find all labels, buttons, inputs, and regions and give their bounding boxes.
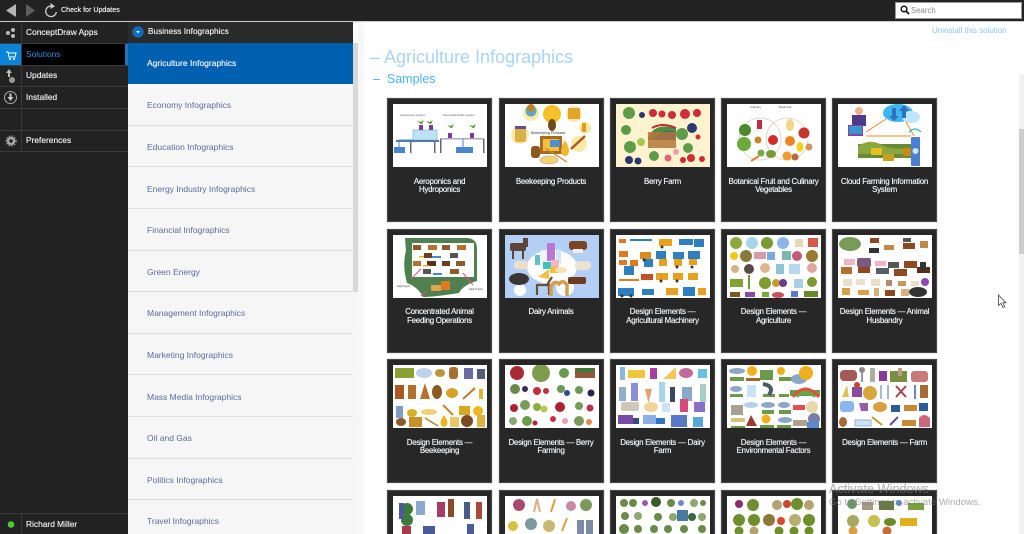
thumbnail: agriculture elements: [727, 235, 821, 298]
list item: Economy: [128, 84, 353, 126]
card title: [737, 438, 810, 455]
card title: Farm: [654, 446, 671, 455]
card title: Husbandry: [867, 316, 902, 325]
card title: Botanical Fruit and Culinary: [729, 176, 818, 186]
thumbnail: venn diagram: [727, 104, 821, 167]
card: Beekeeping Products: [498, 98, 604, 222]
card title: Beekeeping Products: [516, 176, 586, 186]
card: Design Elements Agriculture: [721, 228, 826, 352]
card: partial plants row: [610, 490, 715, 534]
card title: Design Elements —: [407, 438, 472, 446]
card title: [626, 307, 700, 325]
card: Botanical Fruit and Culinary Vegetables: [721, 98, 826, 222]
list scrollbar: [353, 43, 358, 292]
thumbnail: beekeeping: [505, 104, 599, 167]
nav: empty row: [0, 109, 128, 131]
nav: Installed: Installed: [26, 92, 57, 102]
nav: Preferences: Preferences: [26, 135, 71, 145]
nav: Installed: [0, 87, 128, 109]
nav: Solutions selected: [0, 44, 128, 66]
card title: [620, 438, 706, 455]
icon: collapse button: [132, 26, 144, 38]
card title: [407, 438, 473, 455]
check for updates label: Check for Updates: [61, 6, 120, 14]
card title: Design Elements — Animal: [840, 307, 929, 316]
list item: Education: [128, 126, 353, 167]
thumbnail: dairy elements: [616, 365, 710, 428]
card: Design Elements Beekeeping: [387, 359, 492, 483]
card title: System: [872, 185, 897, 194]
card: Aeroponics and Hydroponics: [387, 98, 492, 222]
thumbnail: animal husbandry: [838, 235, 932, 298]
list item: Mass Media: Mass Media Infographics: [147, 392, 242, 402]
thumbnail: aeroponics diagram: Aeroponics system: [400, 113, 426, 117]
card: Design Elements Dairy Farm: [610, 359, 715, 483]
list item: Energy: [128, 168, 353, 209]
page scrollbar thumb: [1019, 129, 1024, 254]
title: – Agriculture Infographics: [370, 47, 573, 67]
card title: Concentrated Animal: [405, 307, 474, 316]
card title: [841, 176, 928, 194]
category header: [128, 22, 353, 43]
card title: Design Elements — Dairy: [620, 438, 705, 446]
icon: refresh: [45, 3, 57, 18]
list item selected: Agriculture Infographics: Agriculture Infographics: [147, 58, 236, 68]
card: Concentrated Animal Feeding Operations: [387, 228, 492, 352]
nav: Updates: [0, 65, 128, 87]
list item: Green Energy: Green Energy: [147, 267, 200, 277]
list item selected: Agriculture Infographics: [128, 43, 353, 85]
category list: [128, 43, 358, 534]
card title: [414, 176, 466, 194]
thumbnail: plants: [616, 496, 710, 534]
thumbnail: cloud farming: [838, 104, 932, 167]
uninstall link: Uninstall this solution: [932, 26, 1007, 35]
thumbnail: venn diagram: Botanical: [779, 105, 792, 109]
card title: Design Elements — Berry: [508, 438, 594, 446]
thumbnail: feedlot: High Output: [469, 286, 483, 290]
nav: ConceptDraw Apps: ConceptDraw Apps: [26, 27, 98, 37]
search box: Search: [911, 6, 936, 15]
thumbnail: beekeeping elements: [393, 365, 487, 428]
card: Design Elements Farm: [832, 359, 937, 483]
card title: Feeding Operations: [407, 316, 472, 325]
nav: ConceptDraw Apps: [0, 22, 128, 44]
card: Design Elements Berry Farming: [498, 359, 604, 483]
card: Dairy Animals: [498, 228, 604, 352]
card title: Agriculture: [756, 316, 791, 325]
list item: Economy: Economy Infographics: [147, 100, 231, 110]
icon: back arrow: [6, 4, 16, 17]
nav: user status: Richard Miller: [26, 519, 77, 529]
watermark: settings note: Go to Settings to activate Windows.: [829, 497, 980, 508]
card: Berry Farm: [610, 98, 715, 222]
thumbnail: herbs: [505, 496, 599, 534]
list item: Education: Education Infographics: [147, 142, 233, 152]
thumbnail: feedlot: High Inputs: [397, 284, 411, 288]
card: partial farm elements row: [832, 490, 937, 534]
list item: Management: [128, 292, 353, 334]
card title: [728, 176, 819, 194]
list item: Oil and Gas: Oil and Gas: [147, 433, 192, 443]
icon: forward arrow: [26, 4, 35, 17]
thumbnail: aeroponics diagram: [393, 104, 487, 167]
card title: Cloud Farming Information: [841, 176, 928, 186]
card title: [405, 307, 474, 325]
samples heading: – Samples: [373, 72, 436, 86]
card: Cloud Farming Information System: [832, 98, 937, 222]
list item: Financial: Financial Infographics: [147, 225, 230, 235]
list item: Mass Media: [128, 376, 353, 417]
list item: Politics: Politics Infographics: [147, 475, 223, 485]
card title: Aeroponics and: [414, 176, 465, 186]
card title: Farming: [537, 446, 565, 455]
card title: Design Elements —: [741, 307, 806, 316]
watermark: Activate Windows: Activate Windows: [829, 482, 929, 496]
list item: Financial: [128, 209, 353, 251]
card title: Agricultural Machinery: [626, 316, 699, 325]
card title: Hydroponics: [419, 185, 460, 194]
thumbnail: berry elements: [505, 365, 599, 428]
thumbnail: fruit trees: [727, 496, 821, 534]
card title: Berry Farm: [644, 176, 681, 186]
icon: magnifier: [900, 6, 910, 15]
category header: Business Infographics: [148, 27, 229, 36]
nav: user status: [0, 513, 128, 534]
nav: Solutions selected: Solutions: [26, 49, 60, 59]
search box: [895, 2, 1022, 19]
card title: [508, 438, 594, 455]
list item: Energy: Energy Industry Infographics: [147, 184, 255, 194]
card title: Environmental Factors: [737, 446, 810, 455]
list item: Green Energy: [128, 251, 353, 292]
list item: Marketing: Marketing Infographics: [147, 350, 233, 360]
card: partial fruit trees row: [721, 490, 826, 534]
thumbnail: farm items: [838, 496, 932, 534]
card: Design Elements Animal Husbandry: [832, 228, 937, 352]
list item: Travel: Travel Infographics: [147, 516, 219, 526]
list item: Marketing: [128, 334, 353, 375]
card title: Vegetables: [755, 185, 792, 194]
thumbnail: dairy animals: [505, 235, 599, 298]
card title: Design Elements —: [630, 307, 695, 316]
thumbnail: beekeeping: Beekeeping Products: [530, 131, 565, 135]
card title: [741, 307, 807, 325]
list item: Politics: [128, 459, 353, 500]
card title: Design Elements — Farm: [842, 438, 927, 446]
content left edge: [358, 22, 364, 534]
card title: Dairy Animals: [528, 307, 573, 316]
card: Design Elements Environmental Factors: [721, 359, 826, 483]
nav: Updates: Updates: [26, 70, 57, 80]
left navigation panel: [0, 22, 128, 534]
thumbnail: farmers: [393, 496, 487, 534]
list item: Oil and Gas: [128, 417, 353, 459]
top toolbar: [0, 0, 1024, 22]
thumbnail: aeroponics diagram: Flood and Drain system: [443, 113, 475, 117]
page scrollbar track: [1019, 74, 1024, 534]
icon: mouse cursor: [998, 294, 1007, 308]
card: partial herbs row: [498, 490, 604, 534]
thumbnail: farm elements: [838, 365, 932, 428]
card title: Design Elements —: [741, 438, 806, 446]
nav: Preferences: [0, 130, 128, 152]
thumbnail: berry farm: [616, 104, 710, 167]
card: Design Elements Agricultural Machinery: [610, 228, 715, 352]
card title: [840, 307, 930, 325]
thumbnail: environment elements: [727, 365, 821, 428]
thumbnail: feedlot: [393, 235, 487, 298]
thumbnail: venn diagram: Culinary: [750, 105, 762, 109]
card: partial people row: [387, 490, 492, 534]
thumbnail: machinery: [616, 235, 710, 298]
list item: Management: Management Infographics: [147, 308, 245, 318]
list item: Travel: [128, 500, 353, 534]
card title: Beekeeping: [420, 446, 459, 455]
